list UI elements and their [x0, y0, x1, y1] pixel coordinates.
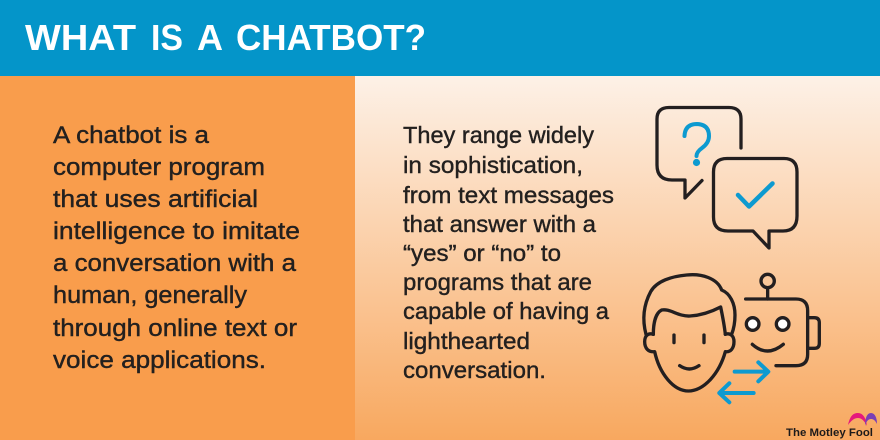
icon: human face	[644, 275, 735, 391]
title: WHAT	[25, 17, 136, 58]
text block: chatbot definition: through online text or	[53, 315, 297, 342]
icon: robot	[746, 274, 819, 366]
logo: The Motley Fool	[786, 413, 877, 439]
text block: range of sophistication: They range widely	[403, 122, 594, 148]
text block: chatbot definition: human, generally	[53, 282, 247, 309]
panel: right gradient background	[355, 76, 880, 440]
title	[25, 17, 426, 58]
text block: range of sophistication	[403, 122, 614, 383]
logo wordmark: The Motley Fool	[786, 427, 873, 439]
title: IS	[151, 17, 183, 58]
text block: range of sophistication: from text messages	[403, 182, 614, 208]
header banner	[0, 0, 880, 76]
panel: left orange background	[0, 76, 355, 440]
text block: range of sophistication: programs that are	[403, 269, 592, 295]
icon: question speech bubble	[657, 108, 741, 198]
icon: jester hat	[848, 413, 877, 426]
text block: range of sophistication: in sophistication,	[403, 152, 583, 178]
text block: range of sophistication: capable of having a	[403, 298, 610, 324]
text block: range of sophistication: conversation.	[403, 357, 546, 383]
text block: chatbot definition: intelligence to imitate	[53, 218, 300, 245]
text block: chatbot definition: a conversation with a	[53, 250, 297, 277]
icon: exchange arrows	[719, 362, 768, 402]
text block: chatbot definition: A chatbot is a	[53, 122, 210, 149]
text block: range of sophistication: lighthearted	[403, 328, 530, 354]
text block: range of sophistication: “yes” or “no” to	[403, 240, 561, 266]
text block: range of sophistication: that answer with a	[403, 211, 597, 237]
title: A	[197, 17, 223, 58]
title: CHATBOT?	[236, 17, 426, 58]
text block: chatbot definition: voice applications.	[53, 347, 266, 374]
text block: chatbot definition	[53, 122, 300, 374]
text block: chatbot definition: computer program	[53, 154, 265, 181]
icon: check speech bubble	[714, 158, 797, 248]
text block: chatbot definition: that uses artificial	[53, 186, 258, 213]
